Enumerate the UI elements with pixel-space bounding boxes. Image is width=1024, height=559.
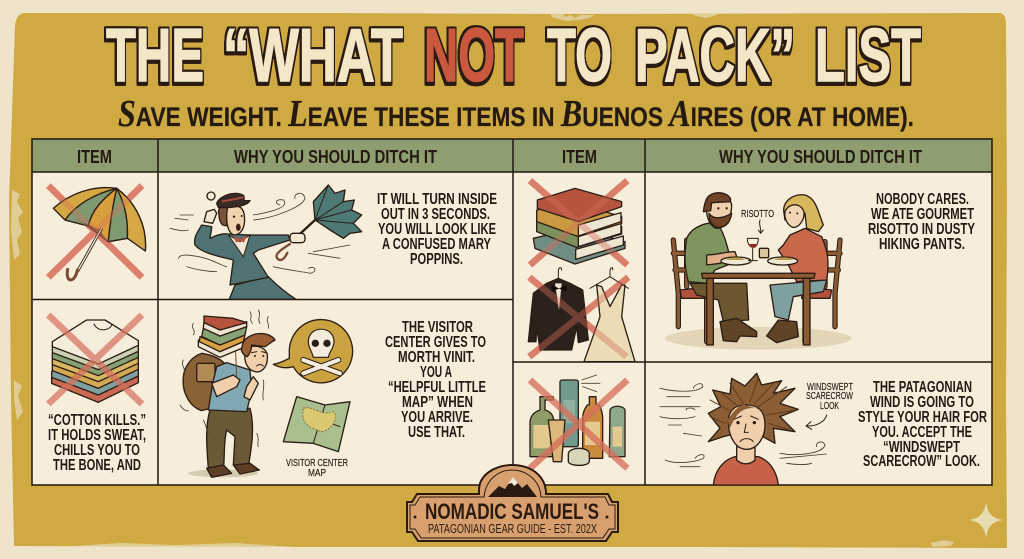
label: windswept scarecrow look: WINDSWEPT <box>807 382 853 393</box>
text: umbrella reason: IT WILL TURN INSIDE <box>377 191 497 208</box>
title: “WHAT <box>223 13 403 97</box>
text: toiletries reason: YOU. ACCEPT THE <box>872 424 972 441</box>
illustration: Mary Poppins in wind <box>170 185 362 299</box>
text: formal wear reason: RISOTTO IN DUSTY <box>868 221 975 238</box>
icon: crossed-out cotton t-shirts <box>48 315 142 404</box>
table header: WHY YOU SHOULD DITCH IT <box>719 147 922 167</box>
right column text <box>741 191 987 470</box>
right column illustrations <box>528 181 852 485</box>
text: guidebook reason: MORTH VINIT. <box>398 349 475 366</box>
table header <box>32 139 992 172</box>
text: guidebook reason: YOU A <box>420 364 452 381</box>
table header: ITEM <box>562 147 597 167</box>
title: PACK” <box>635 13 795 97</box>
text: guidebook reason: YOU ARRIVE. <box>401 409 473 426</box>
table background <box>32 139 992 485</box>
table header: WHY YOU SHOULD DITCH IT <box>234 147 437 167</box>
text: cotton kills: “COTTON KILLS.” <box>48 412 146 429</box>
text: guidebook reason: THE VISITOR <box>402 319 473 336</box>
subtitle: SAVE WEIGHT. LEAVE THESE ITEMS IN BUENOS AIRES (OR AT HOME). <box>118 93 914 135</box>
wooden chairs <box>673 240 840 342</box>
footer badge: PATAGONIAN GEAR GUIDE - EST. 202X <box>428 521 597 536</box>
text: cotton kills <box>48 412 146 474</box>
label: windswept scarecrow look: LOOK <box>820 401 839 412</box>
label: visitor center map: MAP <box>308 468 326 479</box>
label: visitor center map <box>286 458 348 479</box>
table <box>32 139 992 485</box>
title: TO <box>547 13 612 97</box>
text: formal wear reason: HIKING PANTS. <box>879 236 965 253</box>
illustration: couple eating risotto in dusty clothes <box>665 193 852 350</box>
text: umbrella reason <box>377 191 497 268</box>
label: windswept scarecrow look <box>806 382 853 412</box>
text: toiletries reason: “WINDSWEPT <box>883 439 960 456</box>
text: toiletries reason: WIND IS GOING TO <box>870 394 974 411</box>
text: toiletries reason: THE PATAGONIAN <box>873 379 972 396</box>
text: cotton kills: CHILLS YOU TO <box>54 442 140 459</box>
text: formal wear reason <box>868 191 975 253</box>
icon: crossed-out umbrella <box>48 186 146 280</box>
left column illustrations <box>48 185 362 477</box>
icon: mountains <box>488 477 537 497</box>
illustration: overloaded backpacker with skull warning and map <box>180 310 353 477</box>
icon: crossed-out toiletries <box>530 375 627 468</box>
icon: sparkle <box>969 502 1003 538</box>
table header: ITEM <box>77 147 112 167</box>
label: visitor center map: VISITOR CENTER <box>286 458 348 469</box>
text: formal wear reason: NOBODY CARES. <box>876 191 969 208</box>
title: NOT <box>424 13 524 97</box>
text: toiletries reason <box>858 379 987 470</box>
label: windswept scarecrow look: SCARECROW <box>806 391 853 402</box>
text: cotton kills: THE BONE, AND <box>53 457 141 474</box>
text: formal wear reason: WE ATE GOURMET <box>871 206 974 223</box>
text: guidebook reason: “HELPFUL LITTLE <box>388 379 486 396</box>
illustration: windswept hair <box>660 373 827 485</box>
left column text <box>48 191 497 479</box>
text: umbrella reason: YOU WILL LOOK LIKE <box>378 221 496 238</box>
label: risotto: RISOTTO <box>741 209 774 220</box>
title: LIST <box>815 13 921 97</box>
text: umbrella reason: OUT IN 3 SECONDS. <box>381 206 490 223</box>
text: umbrella reason: POPPINS. <box>410 251 463 268</box>
title: THE <box>106 13 204 97</box>
footer badge <box>407 465 618 541</box>
text: cotton kills: IT HOLDS SWEAT, <box>48 427 146 444</box>
title <box>106 13 921 97</box>
text: guidebook reason: CENTER GIVES TO <box>385 334 486 351</box>
text: umbrella reason: A CONFUSED MARY <box>382 236 491 253</box>
text: guidebook reason: USE THAT. <box>408 424 465 441</box>
footer badge: NOMADIC SAMUEL'S <box>425 499 599 524</box>
icon: crossed-out books and formal wear <box>528 181 635 362</box>
text: guidebook reason: MAP” WHEN <box>402 394 473 411</box>
text: guidebook reason <box>385 319 486 441</box>
